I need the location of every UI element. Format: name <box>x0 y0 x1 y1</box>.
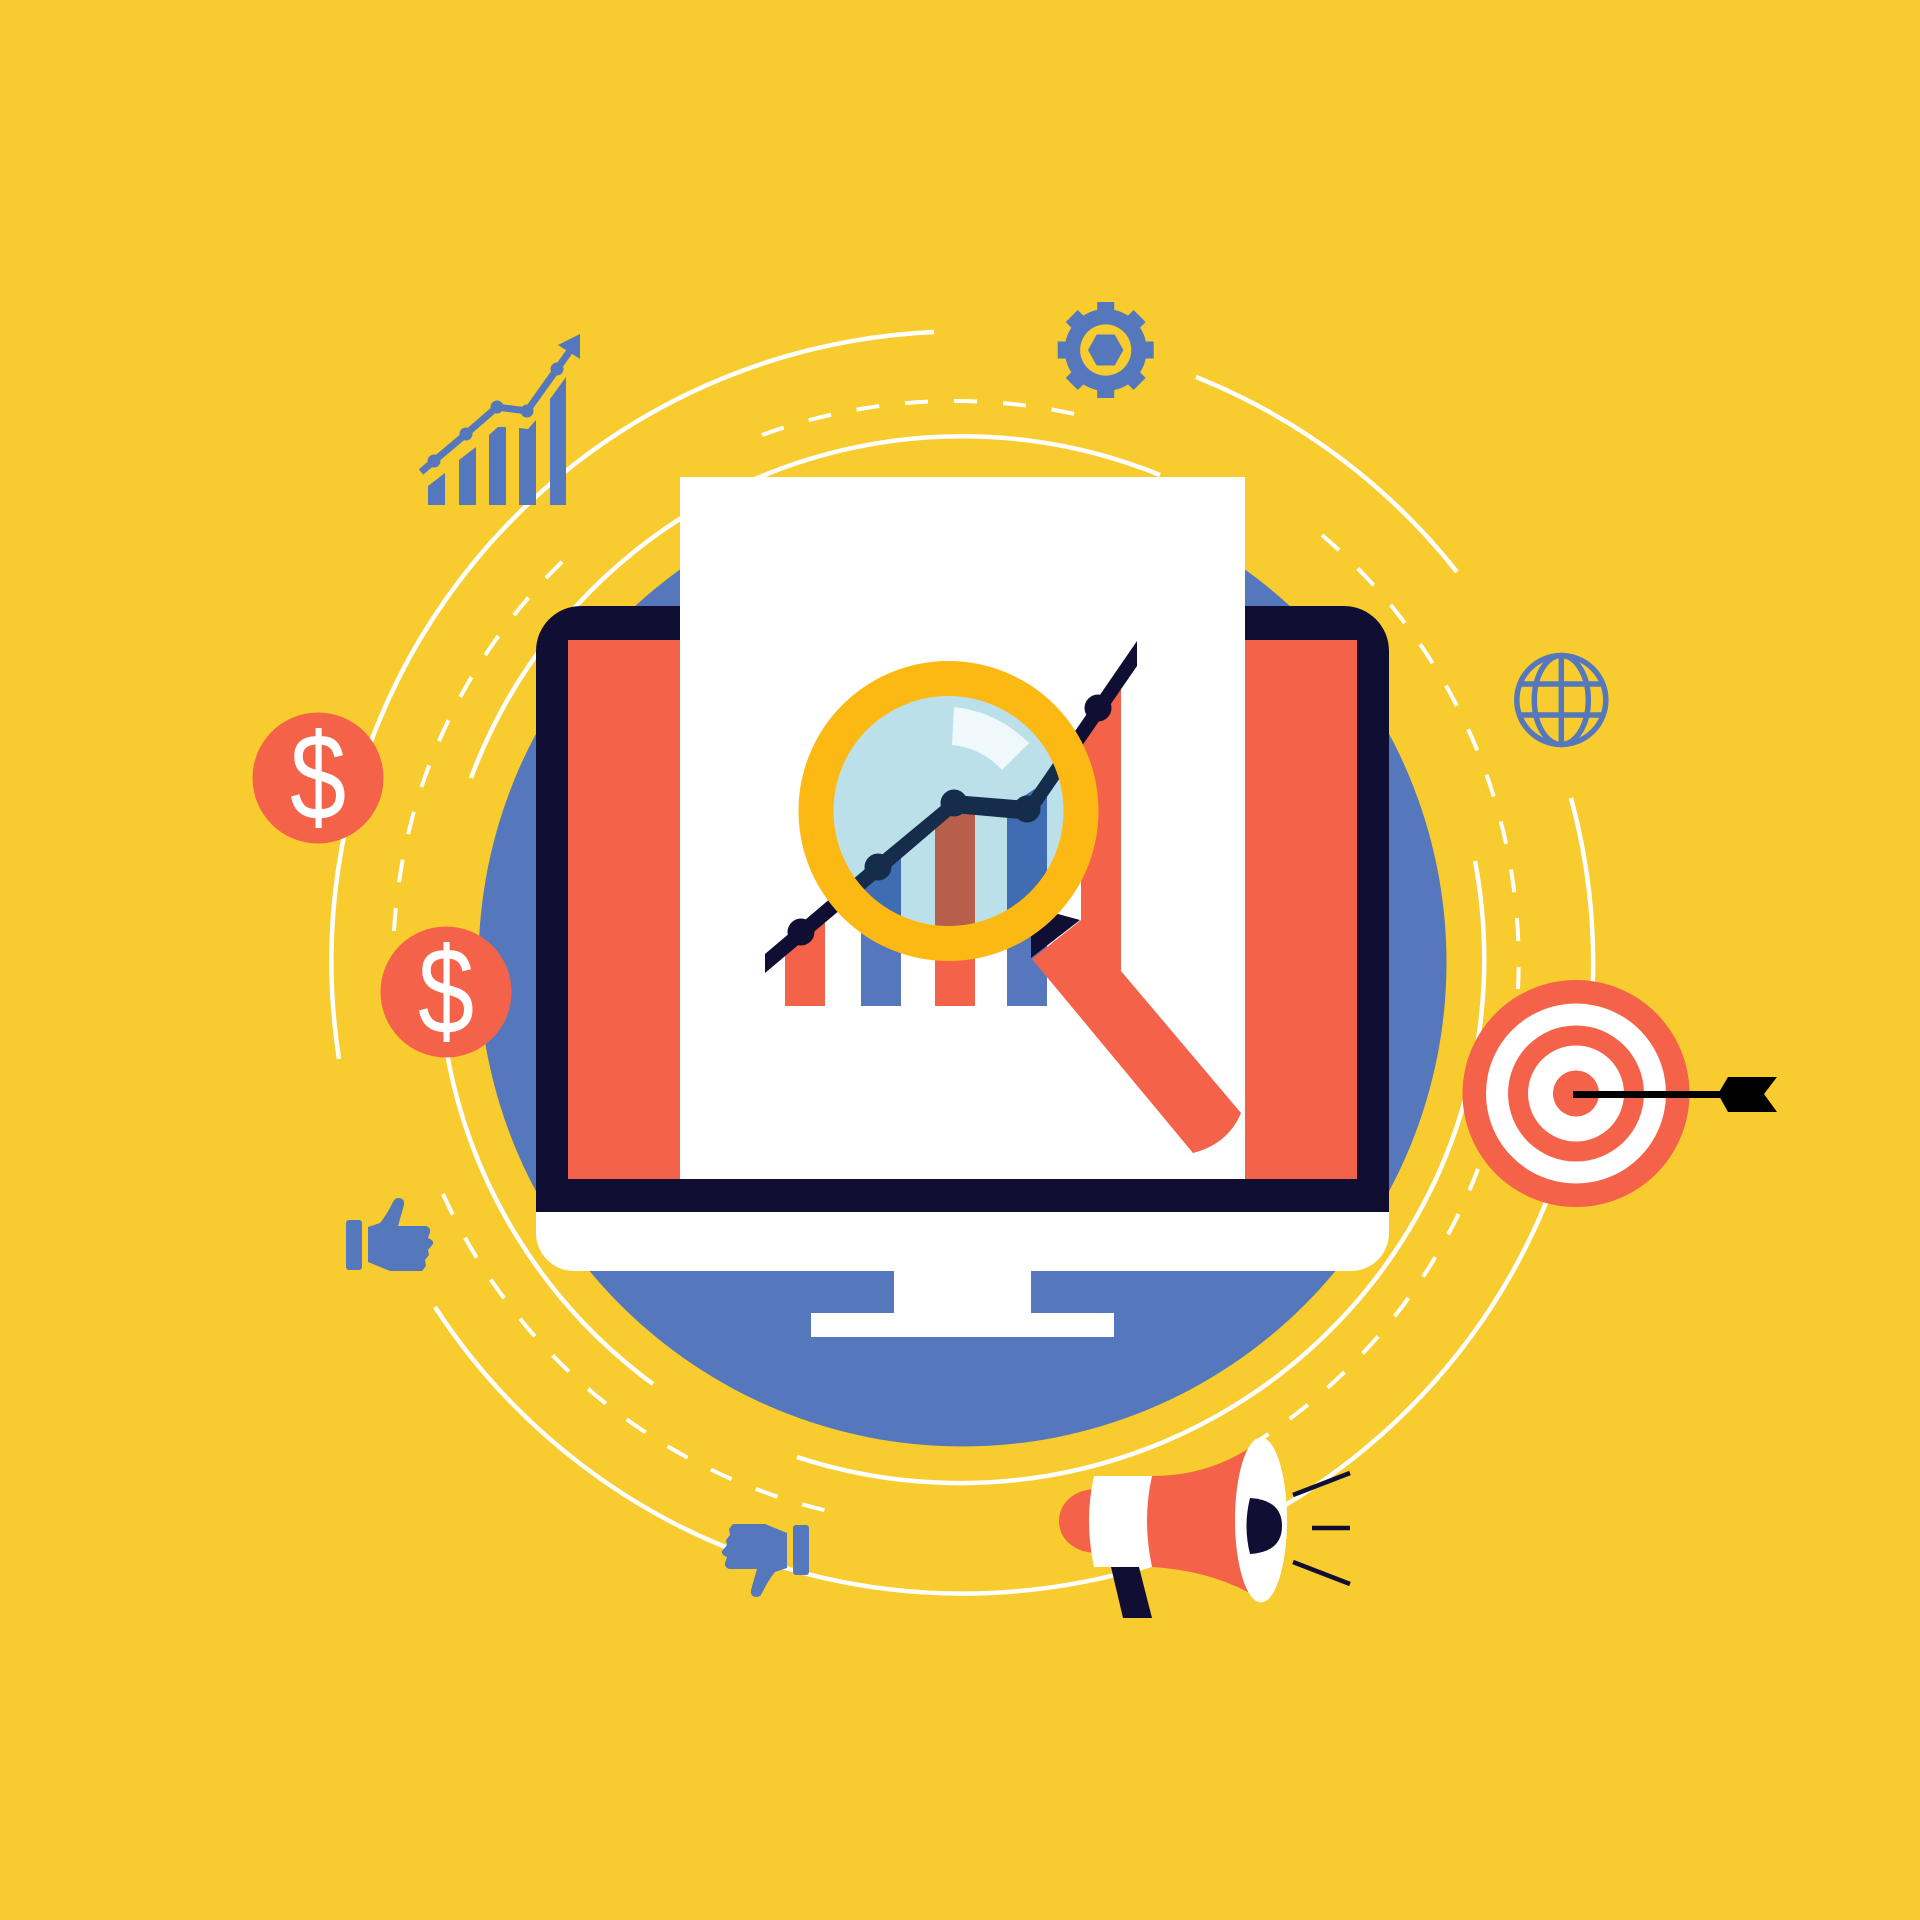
sound lines <box>1293 1473 1350 1584</box>
handle shadow <box>1031 914 1080 958</box>
magnified trend line <box>854 763 1059 890</box>
megaphone cap <box>1059 1489 1094 1553</box>
bar 4 <box>1007 781 1047 1006</box>
bar 1 <box>785 915 825 1006</box>
monitor chin <box>536 1212 1389 1271</box>
megaphone mouth <box>1235 1438 1287 1602</box>
bar 3 <box>935 805 975 1006</box>
lens highlight <box>952 707 1029 770</box>
inner solid ring <box>447 436 1484 1483</box>
dollar coin top <box>252 708 384 846</box>
outer solid ring <box>331 332 1593 1594</box>
bar chart <box>765 641 1137 1006</box>
blue circle backdrop <box>478 478 1446 1446</box>
magnified bars <box>864 788 1047 926</box>
orbit rings <box>331 332 1593 1594</box>
monitor screen <box>568 640 1357 1179</box>
trend line <box>765 641 1137 973</box>
lens glass <box>830 693 1066 929</box>
icon: megaphone <box>1059 1438 1350 1618</box>
icon: target <box>1462 980 1777 1207</box>
icon: globe <box>1517 655 1606 745</box>
report paper <box>680 477 1245 1179</box>
illustration <box>252 302 1777 1618</box>
megaphone handle <box>1111 1567 1152 1618</box>
megaphone cone <box>1140 1449 1248 1592</box>
dollar coin bottom: $ <box>418 922 474 1060</box>
monitor stand <box>811 1265 1114 1337</box>
megaphone opening <box>1246 1498 1282 1554</box>
icon: growth chart <box>421 334 580 505</box>
bar 5 <box>1081 688 1121 980</box>
dashed ring <box>394 401 1519 1511</box>
arrow <box>1573 1077 1777 1112</box>
magnifying glass ring <box>816 678 1081 944</box>
dollar coin top: $ <box>290 708 346 846</box>
icon: gear <box>1058 302 1154 398</box>
icon: thumbs up <box>346 1198 433 1271</box>
magnifying glass handle <box>1031 914 1241 1153</box>
bar 2 <box>861 849 901 1006</box>
dollar coin bottom <box>380 922 512 1060</box>
handle <box>1032 920 1241 1153</box>
monitor body <box>536 606 1389 1212</box>
magnifying lens <box>834 696 1064 926</box>
megaphone band <box>1089 1476 1152 1567</box>
monitor <box>536 606 1389 1337</box>
icon: thumbs down <box>722 1524 809 1597</box>
